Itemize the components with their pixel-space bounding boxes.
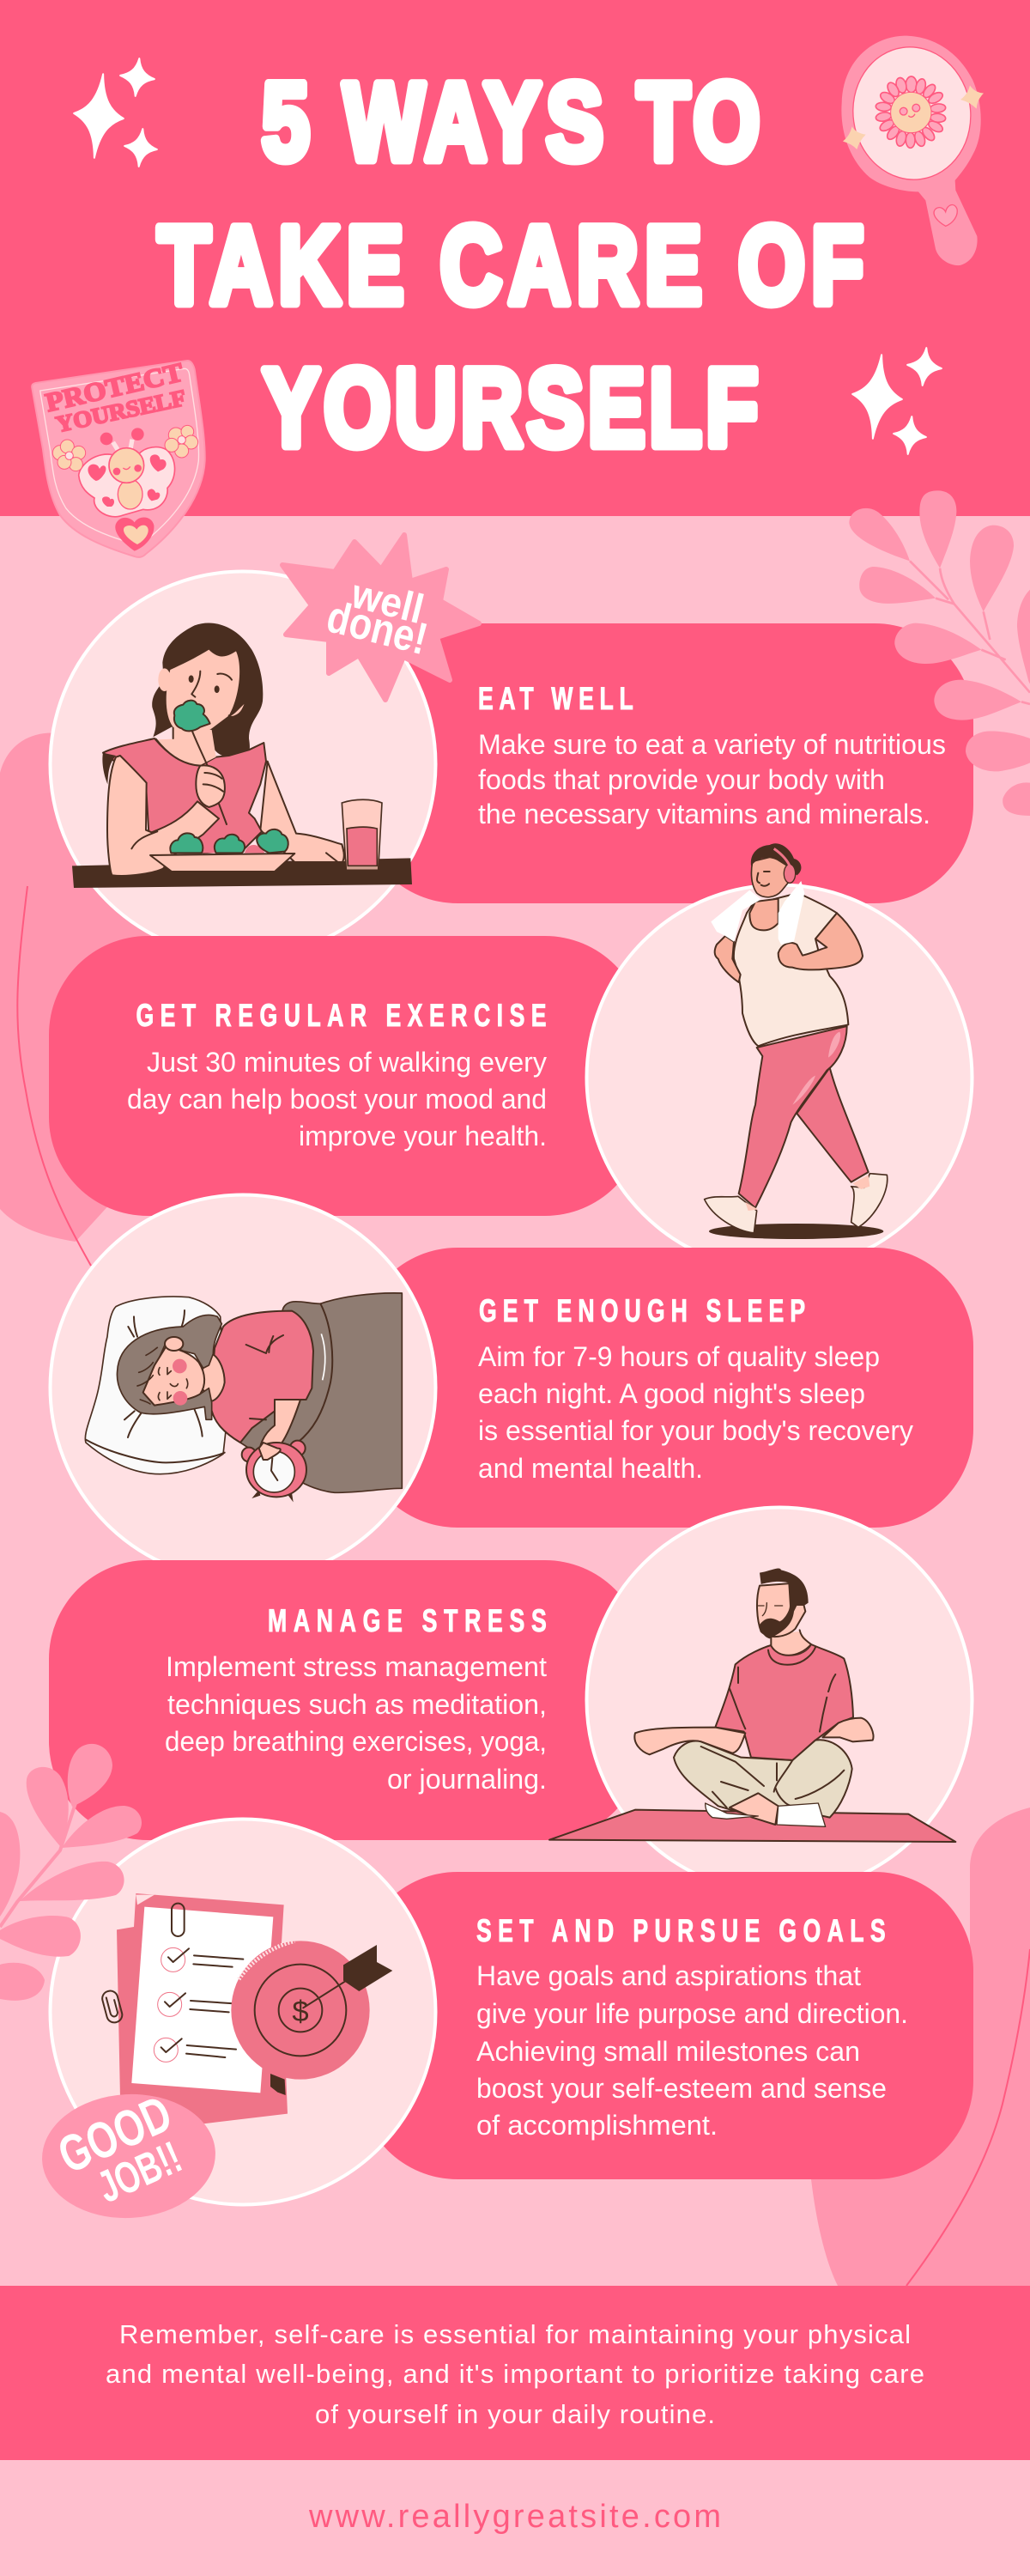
heading: set and pursue goals: SET AND PURSUE GOALS bbox=[476, 1913, 886, 1948]
text: manage stress: or journaling. bbox=[387, 1764, 547, 1795]
wings bbox=[79, 447, 175, 517]
panel: get regular exercise bbox=[49, 936, 644, 1216]
text: get regular exercise: Just 30 minutes of walking every bbox=[147, 1047, 547, 1078]
head bbox=[757, 1583, 805, 1637]
shirt bbox=[210, 1311, 313, 1443]
icon: hand mirror bbox=[841, 36, 984, 265]
arm bbox=[259, 1400, 300, 1459]
panel: get enough sleep bbox=[359, 1248, 973, 1528]
sticker: well done: done! bbox=[322, 592, 433, 665]
blanket bbox=[240, 1293, 402, 1492]
background blob: left bbox=[0, 732, 172, 1242]
antennae bbox=[113, 440, 132, 453]
checklist bbox=[154, 1947, 185, 2062]
circle: sleep bbox=[50, 1195, 436, 1580]
face bbox=[167, 650, 239, 732]
text: eat well: foods that provide your body with bbox=[478, 764, 885, 795]
background line: right bbox=[906, 1949, 1030, 2286]
text: set and pursue goals: Have goals and aspirations that bbox=[476, 1960, 861, 1991]
leg: back bbox=[797, 1067, 869, 1182]
flowers bbox=[52, 425, 198, 471]
hand: right bbox=[822, 1718, 874, 1741]
title bbox=[158, 61, 863, 470]
ink texture bbox=[270, 2074, 286, 2095]
wing hearts bbox=[88, 454, 167, 507]
arrow bbox=[303, 1981, 346, 2008]
arm: left bbox=[634, 1728, 745, 1754]
circle: eat well bbox=[50, 572, 436, 957]
text: get regular exercise: improve your health. bbox=[299, 1121, 547, 1151]
illustration: woman eating bbox=[72, 623, 412, 888]
sticker text: GOOD bbox=[50, 2084, 180, 2184]
dollar sign: $ bbox=[292, 1996, 309, 2028]
title: TAKE CARE OF bbox=[158, 204, 863, 327]
neck bbox=[202, 1354, 225, 1401]
text: set and pursue goals: of accomplishment. bbox=[476, 2110, 718, 2141]
table bbox=[72, 858, 412, 888]
hair and beard bbox=[759, 1569, 809, 1638]
panel: eat well bbox=[359, 623, 973, 903]
pants bbox=[674, 1740, 852, 1820]
background blob: right bbox=[811, 1807, 1030, 2286]
title: YOURSELF bbox=[263, 347, 758, 470]
sticker text: well bbox=[346, 571, 428, 633]
heading: manage stress: MANAGE STRESS bbox=[268, 1603, 547, 1638]
shoes bbox=[705, 1174, 888, 1233]
neck bbox=[157, 724, 216, 765]
text: get enough sleep: is essential for your body's recovery bbox=[478, 1415, 913, 1446]
text: manage stress: Implement stress management bbox=[166, 1651, 547, 1682]
circle: stress bbox=[587, 1508, 972, 1893]
arm: right bbox=[260, 762, 346, 862]
arm: right bbox=[779, 913, 863, 969]
footer band bbox=[0, 2286, 1030, 2460]
text: eat well bbox=[478, 729, 946, 829]
leg highlights bbox=[792, 1032, 840, 1105]
heading: get regular exercise: GET REGULAR EXERCISE bbox=[136, 998, 547, 1033]
clock bbox=[251, 1490, 294, 1502]
decoration: leaves bottom left bbox=[0, 1744, 142, 2001]
icon: protect yourself badge: YOURSELF bbox=[53, 385, 188, 437]
website: www.reallygreatsite.com bbox=[308, 2499, 721, 2535]
text: eat well: Make sure to eat a variety of nutritious bbox=[478, 729, 946, 760]
broccoli: on fork bbox=[174, 701, 210, 731]
head bbox=[751, 856, 789, 897]
circle: exercise bbox=[587, 884, 972, 1271]
paper clips bbox=[172, 1904, 185, 1936]
illustration: checklist and target bbox=[100, 1893, 392, 2123]
hair back bbox=[152, 623, 263, 758]
sticker: good job: JOB!! bbox=[90, 2132, 189, 2213]
closing text: of yourself in your daily routine. bbox=[315, 2399, 715, 2429]
plate bbox=[150, 854, 294, 872]
heading: eat well: EAT WELL bbox=[478, 681, 633, 716]
hair bbox=[751, 843, 801, 875]
text: set and pursue goals: Achieving small milestones can bbox=[476, 2036, 860, 2067]
text: get enough sleep: each night. A good night's sleep bbox=[478, 1378, 865, 1409]
circle: goals bbox=[50, 1819, 436, 2205]
text: get regular exercise: day can help boost your mood and bbox=[127, 1084, 547, 1115]
illustration: jogger bbox=[705, 843, 888, 1239]
illustration: sleeping woman bbox=[85, 1293, 402, 1502]
body bbox=[118, 479, 142, 509]
shirt bbox=[715, 1644, 853, 1760]
leg: front bbox=[739, 1026, 847, 1208]
shirt bbox=[734, 893, 848, 1046]
badge text: PROTECT bbox=[43, 357, 186, 417]
hand bbox=[259, 1443, 281, 1460]
illustration: meditating man bbox=[549, 1569, 955, 1842]
heading: get enough sleep: GET ENOUGH SLEEP bbox=[479, 1293, 805, 1328]
paper backing bbox=[117, 1893, 288, 2123]
title: 5 WAYS TO bbox=[262, 61, 760, 184]
shadow bbox=[709, 1224, 883, 1239]
flower petals bbox=[876, 76, 946, 148]
flower face bbox=[891, 92, 931, 133]
heart bbox=[115, 517, 154, 551]
header band bbox=[0, 0, 1030, 516]
dress bbox=[103, 738, 266, 853]
icon: protect yourself badge bbox=[32, 357, 205, 557]
panel: manage stress bbox=[49, 1560, 644, 1840]
text: get enough sleep: and mental health. bbox=[478, 1453, 703, 1484]
text: manage stress bbox=[165, 1651, 547, 1795]
target bbox=[231, 1941, 370, 2080]
sparkles bbox=[960, 85, 984, 109]
text: eat well: the necessary vitamins and minerals. bbox=[478, 799, 930, 829]
glass bbox=[342, 799, 382, 870]
text: set and pursue goals: give your life purpose and direction. bbox=[476, 1998, 908, 2029]
closing text bbox=[106, 2319, 924, 2429]
sparkles: right bbox=[848, 346, 943, 456]
headphone bbox=[784, 864, 796, 883]
sticker: good job bbox=[39, 2084, 219, 2222]
text: get enough sleep bbox=[478, 1341, 913, 1484]
closing text: Remember, self-care is essential for maintaining your physical bbox=[119, 2319, 911, 2349]
face bbox=[143, 1346, 204, 1406]
hand: right bbox=[326, 844, 344, 863]
closing text: and mental well-being, and it's important to prioritize taking care bbox=[106, 2359, 924, 2389]
socks bbox=[706, 1803, 826, 1826]
paper sheet bbox=[131, 1907, 273, 2093]
panel: set and pursue goals bbox=[359, 1872, 973, 2179]
mat bbox=[549, 1810, 955, 1842]
arm: left bbox=[107, 756, 219, 876]
decoration: leaves top right bbox=[849, 490, 1030, 816]
neck bbox=[771, 1631, 811, 1656]
text: get regular exercise bbox=[127, 1047, 547, 1151]
pillow bbox=[85, 1297, 226, 1474]
text: set and pursue goals: boost your self-esteem and sense bbox=[476, 2073, 887, 2104]
sparkles: top left bbox=[70, 57, 159, 168]
text: manage stress: techniques such as meditation, bbox=[167, 1689, 547, 1720]
sticker: well done bbox=[282, 535, 479, 700]
arm: left bbox=[715, 936, 741, 982]
text: manage stress: deep breathing exercises, yoga, bbox=[165, 1726, 547, 1757]
text: set and pursue goals bbox=[476, 1960, 908, 2141]
text: get enough sleep: Aim for 7-9 hours of quality sleep bbox=[478, 1341, 880, 1372]
background line: left bbox=[17, 886, 91, 1266]
fork and hand bbox=[191, 730, 227, 824]
heart bbox=[934, 205, 957, 226]
foot bbox=[730, 1793, 779, 1825]
towel bbox=[711, 881, 804, 945]
neck bbox=[749, 899, 779, 930]
hair bbox=[117, 1315, 221, 1419]
broccoli: on plate bbox=[202, 845, 264, 853]
